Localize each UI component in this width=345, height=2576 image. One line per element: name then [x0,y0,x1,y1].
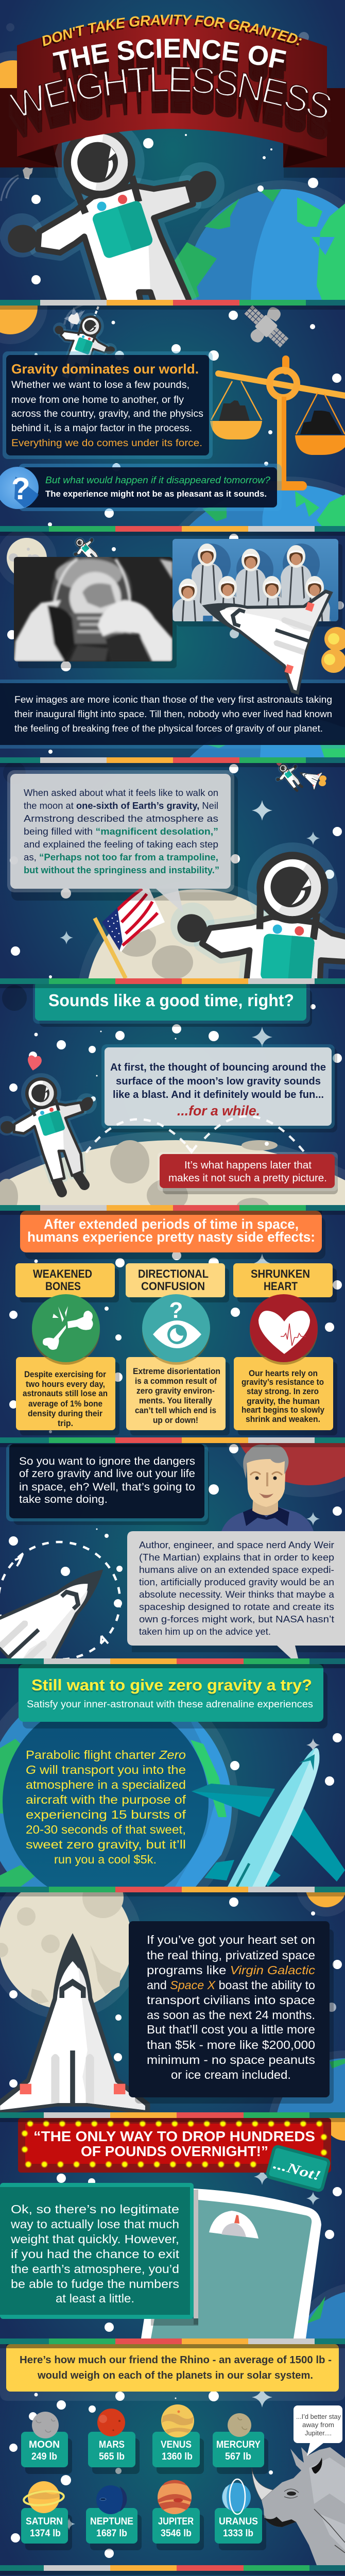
card: weakened bones: astronauts still lose an [23,1389,108,1398]
icon: question mark [0,467,39,509]
text box: private programs: than $5k - more like $200,000 [147,2038,315,2052]
callout: rhino weight heading [0,2344,345,2401]
title line 1: DON'T TAKE GRAVITY FOR GRANTED: [41,16,301,48]
title line 2: THE SCIENCE OF [53,39,286,87]
planet: Jupiter: JUPITER [158,2516,194,2527]
speech bubble: bouncing: surface of the moon’s low gravity sounds [116,1076,321,1087]
card: weakened bones [15,1263,119,1435]
icon: lower moon surface [0,1131,345,1902]
heading: Gravity dominates our world. [11,361,199,377]
icon: heart with ecg [250,1294,318,1362]
icon: moon surface [86,889,310,1114]
speech bubble: Armstrong: and explained the feeling of taking each step [24,839,218,850]
speech bubble: Armstrong: the moon at one-sixth of Earth’s gravity, Neil [24,801,218,811]
text box: gravity dominates [3,351,213,459]
header: still want to give it a try: Still want to give zero gravity a try? [31,1676,312,1694]
card: directional confusion: DIRECTIONAL [138,1267,209,1280]
section 6: side effects [0,1205,345,1437]
planet: Mercury: MERCURY [216,2439,261,2450]
planet: Jupiter: 3546 lb [161,2528,192,2539]
icon: full moon [0,1875,132,2009]
icon: rotating shuttle with dashed orbit [0,1524,145,1708]
speech bubble: bouncing: ...for a while. [177,1103,260,1118]
body copy: Whether we want to lose a few pounds, [11,380,189,391]
icon: american flag [95,889,165,978]
planet: Uranus [215,2479,266,2550]
icon: earth with text disc: aircraft with the purpose of [26,1793,186,1806]
speech bubble: rhino: away from [302,2421,334,2429]
badge: not [267,2146,330,2191]
card: weakened bones: Despite exercising for [24,1370,107,1379]
icon: satellite [244,306,288,347]
planet: Uranus: URANUS [219,2516,258,2527]
icon: earth with text disc: experiencing 15 bursts of [26,1808,186,1821]
speech bubble: bouncing: like a blast. And it definitely would be fun... [113,1089,324,1100]
planet: Moon: MOON [29,2439,60,2450]
speech bubble: bouncing: At first, the thought of bouncing around the [110,1062,326,1073]
icon: eye with question mark: ? [169,1298,183,1323]
text box: private programs: If you’ve got your heart set on [147,1933,315,1946]
body copy: move from one home to another, or fly [11,395,184,405]
speech bubble: rhino: ...I’d better stay [296,2413,341,2420]
planet: Moon [21,2412,72,2474]
card: shrunken heart: gravity’s resistance to [242,1378,324,1387]
card: directional confusion: zero gravity environ- [136,1386,215,1396]
card: weakened bones: density during their [28,1409,103,1418]
text box: ignore the dangers: So you want to ignore the dangers [19,1455,195,1467]
card: shrunken heart: SHRUNKEN [251,1267,310,1280]
icon: sun [0,306,38,334]
body copy: behind it, is a major factor in the process. [11,423,192,434]
planet: Venus: VENUS [161,2439,192,2450]
speech bubble: Andy Weir [127,1531,345,1658]
text band: iconic images: Few images are more iconic than those of the very first astronauts taking [14,694,332,705]
section 3: first astronauts [0,526,345,757]
ribbon tails [0,88,345,178]
title line 3: WEIGHTLESSNESS [10,66,331,140]
ribbon banner [17,18,327,167]
body copy [11,380,203,449]
speech bubble: Armstrong: but without the springiness and instability.” [24,865,219,875]
section 11: rhino on planets [0,2338,345,2565]
card: weakened bones: WEAKENED [33,1267,92,1280]
card: weakened bones: BONES [45,1280,81,1293]
earth [175,180,345,300]
body copy: across the country, gravity, and the physics [11,409,203,419]
planet: Saturn [21,2481,72,2550]
card: shrunken heart: HEART [264,1280,298,1293]
icon: orange sun [0,60,17,88]
icon: space shuttle with flames [202,589,345,695]
planet: Jupiter [152,2480,204,2550]
card: directional confusion: can’t tell which end is [135,1406,216,1415]
card: directional confusion [126,1263,230,1435]
text box: ignore the dangers: take some doing. [19,1494,108,1505]
text box: no legitimate way: if you had the chance to exit [11,2247,180,2261]
planet: Venus [152,2404,204,2474]
planet: Neptune: 1687 lb [96,2528,127,2539]
text box: no legitimate way: Ok, so there’s no legitimate [11,2202,179,2216]
callout: red pretty picture box: It’s what happens later that [184,1160,312,1171]
speech bubble: bouncing [101,1044,337,1132]
card: shrunken heart [233,1263,337,1435]
icon: earth with text disc: 20-30 seconds of that sweet, [26,1823,186,1836]
header: sounds like a good time: Sounds like a good time, right? [48,991,294,1010]
text box: no legitimate way: the earth’s atmosphere, you’d [11,2262,179,2276]
speech bubble: Andy Weir: Author, engineer, and space nerd Andy Weir [139,1539,334,1550]
icon: airplane [192,1748,345,1887]
icon: earth with text disc: run you a cool $5k. [54,1853,157,1866]
marquee sign: OF POUNDS OVERNIGHT!” [81,2143,268,2159]
card: directional confusion: ments. You literally [139,1396,213,1405]
card: shrunken heart: gravity, the human [247,1397,320,1406]
photo: group of seven astronauts [173,539,342,626]
header: still want to give it a try: Satisfy your inner-astronaut with these adrenaline experiences [27,1699,313,1710]
text box: what if it disappeared: But what would happen if it disappeared tomorrow? [45,475,270,485]
text box: private programs: the real thing, privatized space [147,1948,315,1962]
icon: broken bone [32,1294,100,1362]
card: shrunken heart: heart begins to slowly [242,1405,325,1415]
speech bubble: Armstrong: When asked about what it feels like to walk on [24,788,218,798]
speech bubble: rhino: Jupiter.... [305,2429,332,2437]
speech bubble: Andy Weir: absolute necessity. Weir thinks that maybe a [139,1589,335,1600]
text box: no legitimate way [0,2183,194,2319]
section 8: zero gravity try [0,1658,345,1935]
icon: earth with text disc: G will transport you into the [26,1763,186,1776]
card: directional confusion: up or down! [153,1416,198,1425]
speech bubble: Andy Weir: own g-forces might work, but NASA hasn’t [139,1614,334,1624]
speech bubble: Armstrong: as, “Perhaps not too far from a trampoline, [24,852,218,862]
marquee sign: “THE ONLY WAY TO DROP HUNDREDS [33,2128,315,2144]
text box: no legitimate way: be able to fudge the numbers [11,2277,179,2291]
icon: earth with text disc [0,1681,232,1923]
icon: earth corner [268,2050,345,2205]
illustration: rhino [252,2447,345,2565]
icon: bathroom scale [141,2189,321,2338]
arrow: dashed bounce arcs [86,1116,306,1154]
title line 1: DON'T TAKE GRAVITY FOR GRANTED: [42,14,302,46]
icon: upright shuttle [0,1933,150,2115]
card: shrunken heart: Our hearts rely on [249,1369,318,1378]
section 10: marquee and scale [0,2099,345,2427]
text band: iconic images: their inaugural flight into space. Till then, nobody who ever lived had known [14,709,332,719]
planet: Mercury: 567 lb [225,2451,251,2462]
card: weakened bones: average of 1% bone [28,1399,102,1409]
icon: earth corner [296,2290,345,2419]
header: side effects: humans experience pretty nasty side effects: [27,1229,315,1245]
callout: rhino weight heading: would weigh on each of the planets in our solar system. [37,2370,313,2381]
text box: what if it disappeared [19,464,282,511]
callout: red pretty picture box: makes it not such a pretty picture. [168,1173,327,1184]
body copy: Everything we do comes under its force. [11,438,202,449]
icon: mini astronaut and shuttle [272,759,326,796]
icon: question mark: ? [11,471,30,506]
card: shrunken heart: stay strong. In zero [247,1387,319,1396]
text box: no legitimate way: way to actually lose that much [10,2217,179,2231]
section 1: hero banner [0,0,345,300]
text box: what if it disappeared: The experience might not be as pleasant as it sounds. [45,489,267,499]
planet: Venus: 1360 lb [162,2451,193,2462]
icon: eye with question mark [142,1294,210,1362]
speech bubble: rhino [294,2405,342,2456]
photo: astronaut in helmet [14,552,177,668]
card: shrunken heart: shrink and weaken. [246,1415,320,1424]
text box: private programs: minimum - no space peanuts [147,2053,315,2066]
speech bubble: Andy Weir: humans alive on an extended space expedi- [139,1564,334,1575]
icon: red planet [230,1328,345,1485]
text box: private programs: transport civilians into space [147,1993,315,2007]
callout: red pretty picture box [158,1152,338,1194]
header: side effects [20,1211,325,1259]
text box: private programs: But that’ll cost you a little more [147,2023,315,2036]
text box: ignore the dangers: of zero gravity and live out your life [19,1468,195,1480]
speech bubble: Andy Weir: spaceship designed to rotate and create its [139,1601,334,1612]
card: directional confusion: is a common result of [135,1377,217,1386]
planet: Mercury [213,2413,268,2474]
text box: private programs: programs like Virgin Galactic [147,1963,315,1977]
badge: not: ...Not! [272,2156,323,2183]
text box: ignore the dangers: in space, eh? Well, that’s going to [19,1481,195,1493]
planet: Moon: 249 lb [31,2451,57,2462]
section 7: Andy Weir [0,1316,345,1708]
text band: iconic images: the feeling of breaking free of the physical forces of gravity of our planet. [14,723,323,734]
speech bubble: Andy Weir: (The Martian) explains that in order to keep [139,1552,334,1563]
section 4: Armstrong quote [0,757,345,978]
section 12: resources [0,2565,345,2576]
header: still want to give it a try [19,1664,327,1728]
icon: sun [305,1866,345,1907]
header: sounds like a good time [33,981,312,1027]
speech bubble: Armstrong: being filled with “magnificent desolation,” [24,826,218,837]
speech bubble: Andy Weir: tion, artificially produced gravity would be an [139,1577,334,1587]
section 5: sounds like a good time [0,978,345,1902]
icon: heart [26,1054,42,1072]
text box: private programs [129,1921,334,2104]
planet: Neptune: NEPTUNE [90,2516,133,2527]
planet: Mars: 565 lb [99,2451,125,2462]
planet: Mars: MARS [99,2439,125,2450]
text box: private programs: and Space X boast the ability to [147,1978,315,1992]
text box: ignore the dangers [6,1444,209,1525]
text box: private programs: or ice cream included. [171,2068,291,2081]
icon: earth with text disc: atmosphere in a specialized [26,1778,186,1791]
header: side effects: After extended periods of time in space, [44,1216,299,1232]
callout: rhino weight heading: Here’s how much our friend the Rhino - an average of 1500 lb - [20,2354,332,2366]
planet: Uranus: 1333 lb [223,2528,253,2539]
section 9: private space programs [0,1857,345,2205]
planet: Mars [88,2409,140,2474]
icon: meteor rock [64,304,98,330]
planet: Saturn: 1374 lb [30,2528,61,2539]
icon: earth with text disc: Parabolic flight charter Zero [26,1748,186,1761]
earth behind copy [189,739,345,757]
speech bubble: Armstrong [7,770,238,913]
icon: earth with text disc: sweet zero gravity, but it’ll [26,1838,186,1851]
card: directional confusion: CONFUSION [141,1280,205,1293]
planet: Neptune [86,2485,142,2550]
card: directional confusion: Extreme disorientation [133,1367,220,1376]
section 2: gravity dominates [0,300,345,526]
text band: iconic images [0,680,345,749]
text box: no legitimate way: weight that quickly. However, [10,2232,179,2246]
icon: balance scale [210,359,345,490]
earth lower right [179,477,345,526]
speech bubble: Andy Weir: taken him up on the advice yet. [139,1626,271,1637]
icon: moon [7,538,47,573]
card: weakened bones: two hours every day, [26,1380,105,1389]
text box: no legitimate way: at least a little. [56,2292,134,2305]
icon: portrait of Andy Weir [221,1445,314,1531]
marquee sign [18,2118,331,2173]
speech bubble: Armstrong: Armstrong described the atmosphere as [24,814,218,824]
planet: Saturn: SATURN [26,2516,63,2527]
card: weakened bones: trip. [58,1419,73,1428]
text box: private programs: as soon as the next 24 months. [147,2008,315,2022]
